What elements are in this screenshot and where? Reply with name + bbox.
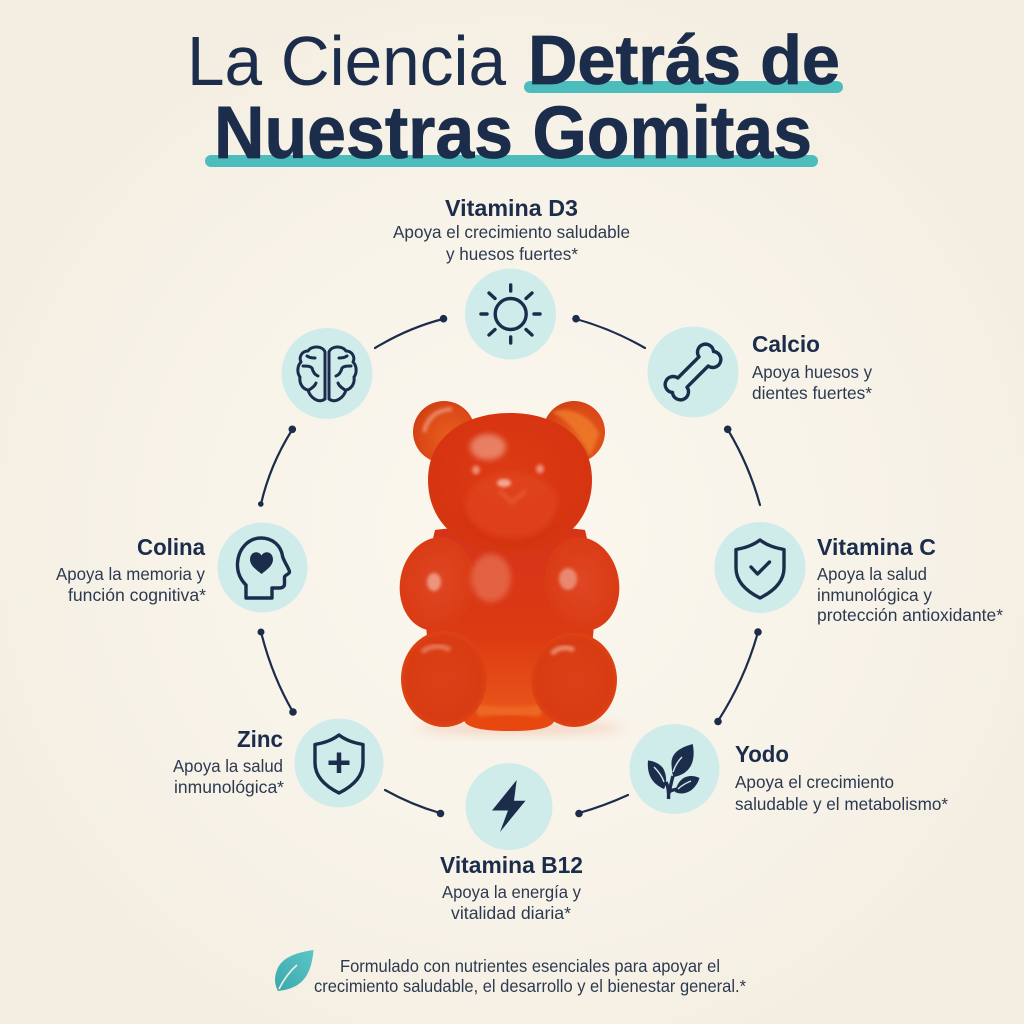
bear highlights (470, 434, 506, 460)
footer note (275, 950, 746, 996)
icon: lightning bolt (466, 763, 552, 850)
text: Vitamina D3: y huesos fuertes* (446, 244, 578, 264)
icon: brain (282, 328, 372, 419)
text: Yodo: Yodo (735, 741, 789, 767)
text: Yodo: Apoya el crecimiento (735, 772, 894, 792)
bear torso (425, 526, 595, 726)
text: Zinc: Apoya la salud (173, 756, 283, 776)
text: Vitamina B12: vitalidad diaria* (451, 903, 571, 923)
title: Detrás de (528, 21, 840, 99)
icon: teal leaf (275, 950, 314, 991)
text: Calcio (752, 331, 872, 403)
bear bottom ledge (464, 712, 555, 731)
bear muzzle (465, 472, 559, 538)
bear shadow (415, 723, 625, 733)
icon: sun (465, 268, 556, 360)
text: Vitamina B12: Apoya la energía y (442, 882, 581, 902)
text: Vitamina B12: Vitamina B12 (440, 852, 583, 878)
text: Vitamina C: inmunológica y (817, 585, 932, 605)
arc connectors (258, 315, 762, 817)
text: Vitamina D3: Vitamina D3 (445, 195, 578, 221)
text: Calcio: dientes fuertes* (752, 383, 872, 403)
title (187, 21, 843, 174)
bear feet (401, 631, 617, 727)
text: Colina: Apoya la memoria y (56, 564, 205, 584)
icon: bone (648, 326, 738, 418)
text: Vitamina C: Apoya la salud (817, 564, 927, 584)
text: Colina: función cognitiva* (68, 585, 206, 605)
bear arms (392, 531, 627, 637)
title: Nuestras Gomitas (214, 91, 812, 174)
text: Vitamina C: Vitamina C (817, 534, 936, 560)
icon: shield with plus (294, 718, 384, 808)
footer note: crecimiento saludable, el desarrollo y el bienestar general.* (314, 976, 746, 996)
text: Zinc: Zinc (237, 726, 283, 752)
bear ears (413, 401, 605, 463)
text: Vitamina D3 (393, 195, 630, 264)
text: Zinc: inmunológica* (174, 777, 284, 797)
text: Vitamina B12 (440, 852, 583, 923)
text: Vitamina C: protección antioxidante* (817, 605, 1003, 625)
text: Colina: Colina (137, 534, 205, 560)
text: Vitamina D3: Apoya el crecimiento saludable (393, 222, 630, 242)
gummy bear (392, 401, 627, 733)
title: La Ciencia (187, 22, 506, 100)
icon: shield with check (714, 522, 806, 613)
text: Calcio: Apoya huesos y (752, 362, 872, 382)
icon: plant leaves (630, 724, 720, 814)
text: Vitamina C (817, 534, 1003, 625)
text: Yodo: saludable y el metabolismo* (735, 794, 948, 814)
bear head (428, 413, 592, 552)
footer note: Formulado con nutrientes esenciales para apoyar el (340, 956, 720, 976)
text: Yodo (735, 741, 948, 814)
text: Colina (56, 534, 206, 605)
text: Calcio: Calcio (752, 331, 820, 357)
text: Zinc (173, 726, 284, 797)
icon: head with heart (218, 522, 308, 612)
